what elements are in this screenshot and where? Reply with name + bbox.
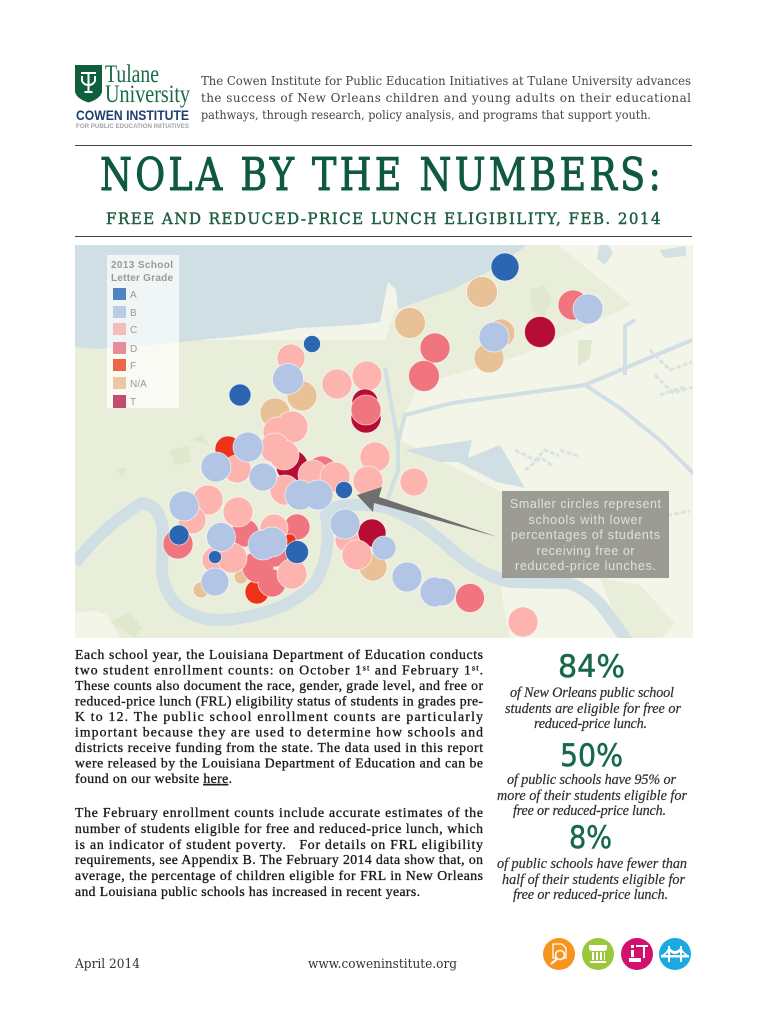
callout (502, 491, 669, 578)
stat: 84%: of New Orleans public school (510, 685, 674, 701)
stat: 84%: students are eligible for free or (505, 701, 681, 717)
body text: paragraph 1: Each school year, the Louisiana Department of Education conducts (75, 647, 483, 662)
logo wordmark (76, 61, 190, 130)
callout: receiving free or (536, 544, 634, 558)
map legend: F (130, 361, 136, 372)
body text: paragraph 2: is an indicator of student poverty. For details on FRL eligibility (75, 837, 483, 852)
body text: paragraph 1: . (480, 662, 483, 678)
stat: 8%: free or reduced-price lunch. (513, 887, 668, 903)
callout: Smaller circles represent (510, 497, 662, 511)
body text: paragraph 1: reduced-price lunch (FRL) eligibility status of students in grades pre- (75, 694, 483, 710)
intro text: The Cowen Institute for Public Education Initiatives at Tulane University advances (201, 74, 691, 88)
stat: 50%: of public schools have 95% or (507, 772, 676, 788)
body text: paragraph 2: and Louisiana public schools has increased in recent years. (75, 884, 420, 899)
map legend: T (130, 397, 136, 408)
callout: percentages of students (511, 528, 660, 542)
intro text: pathways, through research, policy analysis, and programs that support youth. (201, 108, 651, 122)
map legend: N/A (130, 379, 147, 390)
body text: paragraph 2: number of students eligible for free and reduced-price lunch, which (75, 821, 483, 836)
map legend: B (130, 308, 137, 319)
body text: paragraph 2 (75, 805, 483, 899)
body text: paragraph 1: districts receive funding from the state. The data used in this report (75, 740, 483, 755)
stat: 84%: reduced-price lunch. (534, 716, 647, 732)
callout: schools with lower (528, 513, 642, 527)
panel: school map (75, 243, 695, 642)
body text: paragraph 1: two student enrollment counts: on October 1 (75, 662, 362, 678)
icon: bridge (659, 938, 691, 970)
logo wordmark: FOR PUBLIC EDUCATION INITIATIVES (76, 123, 190, 130)
stat: 50%: free or reduced-price lunch. (513, 803, 666, 819)
icon: scroll (621, 938, 653, 970)
icon: research (543, 938, 575, 970)
stat: 8%: 8% (569, 820, 612, 856)
arrow (357, 487, 498, 537)
map legend: Letter Grade (111, 273, 173, 284)
stat: 50%: 50% (560, 738, 623, 774)
body text: paragraph 1: These counts also document the race, gender, grade level, and free or (75, 678, 483, 693)
body text: paragraph 2: The February enrollment counts include accurate estimates of the (75, 805, 483, 820)
logo: Tulane University Cowen Institute (75, 61, 190, 130)
body text: paragraph 1: st (363, 662, 370, 672)
callout: reduced-price lunches. (515, 559, 656, 573)
stat: 8%: of public schools have fewer than (497, 856, 687, 872)
logo wordmark: COWEN INSTITUTE (76, 108, 189, 123)
footer date: April 2014 (74, 957, 140, 972)
school circles (163, 253, 603, 637)
logo wordmark: Tulane (105, 61, 159, 88)
footer url: www.coweninstitute.org (308, 957, 457, 972)
body text: paragraph 2: requirements, see Appendix B. The February 2014 data show that, on (75, 852, 483, 867)
icon: Tulane shield (75, 65, 102, 102)
intro text: the success of New Orleans children and young adults on their educational (201, 91, 691, 105)
body text: paragraph 1: and February 1 (370, 662, 471, 678)
map legend: A (130, 290, 137, 301)
stat: 84% (505, 649, 681, 732)
stat: 50% (497, 738, 687, 819)
stat: 84%: 84% (558, 649, 625, 685)
body text: paragraph 1: were released by the Louisiana Department of Education and can be (75, 756, 483, 770)
logo wordmark: University (105, 81, 190, 108)
subtitle: FREE AND REDUCED-PRICE LUNCH ELIGIBILITY, FEB. 2014 (106, 209, 662, 228)
stat: 8% (497, 820, 687, 903)
body text: paragraph 1: found on our website here. (75, 771, 232, 786)
body text: paragraph 2: average, the percentage of children eligible for FRL in New Orleans (75, 868, 483, 883)
stat: 8%: half of their students eligible for (502, 872, 685, 888)
map legend (107, 255, 179, 408)
map legend: D (130, 344, 137, 355)
body text: paragraph 1: st (472, 662, 479, 672)
map legend: C (130, 325, 137, 336)
icon: column (582, 938, 614, 970)
stat: 50%: more of their students eligible for (497, 788, 687, 804)
intro text (201, 74, 691, 122)
body text: paragraph 1: K to 12. The public school enrollment counts are particularly (75, 709, 483, 724)
body text: paragraph 1: important because they are used to determine how schools and (75, 724, 483, 740)
map legend: 2013 School (111, 260, 173, 271)
body text: paragraph 1 (75, 647, 483, 786)
